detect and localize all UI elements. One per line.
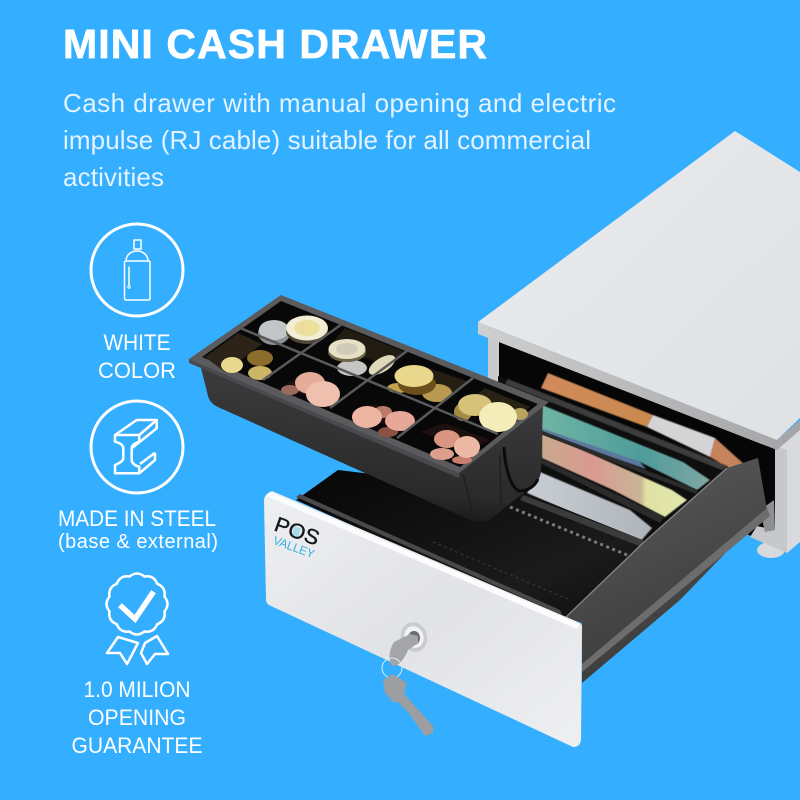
main divider [520, 495, 645, 547]
right side [777, 428, 800, 553]
cabinet foot [757, 542, 785, 558]
perforation strip [510, 507, 627, 555]
coins top row left [258, 316, 328, 345]
label: white color: WHITE [104, 330, 170, 355]
cabinet interior [490, 335, 777, 540]
panel bevel shadow [296, 494, 562, 615]
tray underside rim [189, 359, 459, 478]
lock [397, 618, 431, 656]
copper coins middle [352, 406, 415, 437]
icon: steel beam [91, 401, 183, 493]
tray end seam [463, 455, 501, 518]
feature: opening guarantee [72, 574, 202, 758]
title: MINI CASH DRAWER [63, 21, 487, 67]
label: made in steel: MADE IN STEEL [58, 506, 216, 531]
tray handle [504, 447, 538, 491]
label: opening guarantee: OPENING [88, 705, 186, 730]
coin tray [189, 295, 549, 522]
coins fourth compartment [454, 394, 528, 432]
tray rim [189, 295, 549, 473]
blue note edge [540, 428, 646, 469]
lower rail [582, 508, 770, 672]
top edge [478, 322, 800, 450]
pink and yellow note [542, 432, 687, 517]
keys [382, 634, 433, 736]
description text [63, 88, 616, 192]
tray dividers [240, 324, 498, 438]
note compartment base [498, 376, 735, 548]
rail bracket [760, 500, 775, 532]
note divider [540, 430, 698, 494]
coins second compartment [328, 339, 398, 379]
key in lock [390, 634, 418, 666]
wall top edge [565, 468, 727, 618]
panel face [264, 491, 582, 747]
coins left compartment [221, 350, 273, 380]
tray inner well [202, 301, 538, 467]
tray body [200, 364, 543, 522]
panel top highlight [266, 492, 580, 629]
orange note [541, 373, 745, 473]
label: opening guarantee [72, 677, 202, 758]
label: white color: COLOR [98, 358, 176, 383]
description text: activities [63, 162, 164, 192]
logo: pos valley: VALLEY [271, 533, 316, 561]
feature: white color [91, 224, 183, 383]
compartment reflections [205, 328, 530, 450]
key ring [382, 658, 402, 678]
banknotes [505, 373, 745, 542]
dark divider [505, 379, 728, 470]
logo: pos valley [268, 513, 323, 561]
silver note [527, 472, 652, 542]
feature: made in steel [58, 401, 218, 553]
right wall [565, 458, 767, 683]
label: made in steel [58, 506, 218, 553]
logo: pos valley: POS [271, 513, 322, 550]
hanging key [383, 674, 433, 736]
label: white color [98, 330, 176, 383]
copper coins lower [430, 430, 480, 464]
label: opening guarantee: 1.0 MILION [84, 677, 190, 702]
description text: impulse (RJ cable) suitable for all commercial [63, 125, 591, 155]
drawer interior [296, 470, 645, 622]
label: made in steel: (base & external) [58, 531, 218, 553]
left pillar [488, 335, 499, 385]
copper coins upper [281, 372, 340, 407]
teal note [540, 405, 710, 490]
label: opening guarantee: GUARANTEE [72, 733, 202, 758]
description text: Cash drawer with manual opening and electric [63, 88, 616, 118]
coins third compartment [387, 365, 452, 402]
open drawer [264, 430, 770, 747]
inner dashed seam [433, 542, 570, 600]
icon: spray can [91, 224, 183, 316]
front panel [264, 491, 582, 747]
front right pillar [750, 446, 787, 553]
top surface [478, 131, 800, 440]
cash drawer cabinet [478, 131, 800, 558]
note divider lower [540, 458, 664, 523]
icon: rosette badge [106, 574, 168, 664]
